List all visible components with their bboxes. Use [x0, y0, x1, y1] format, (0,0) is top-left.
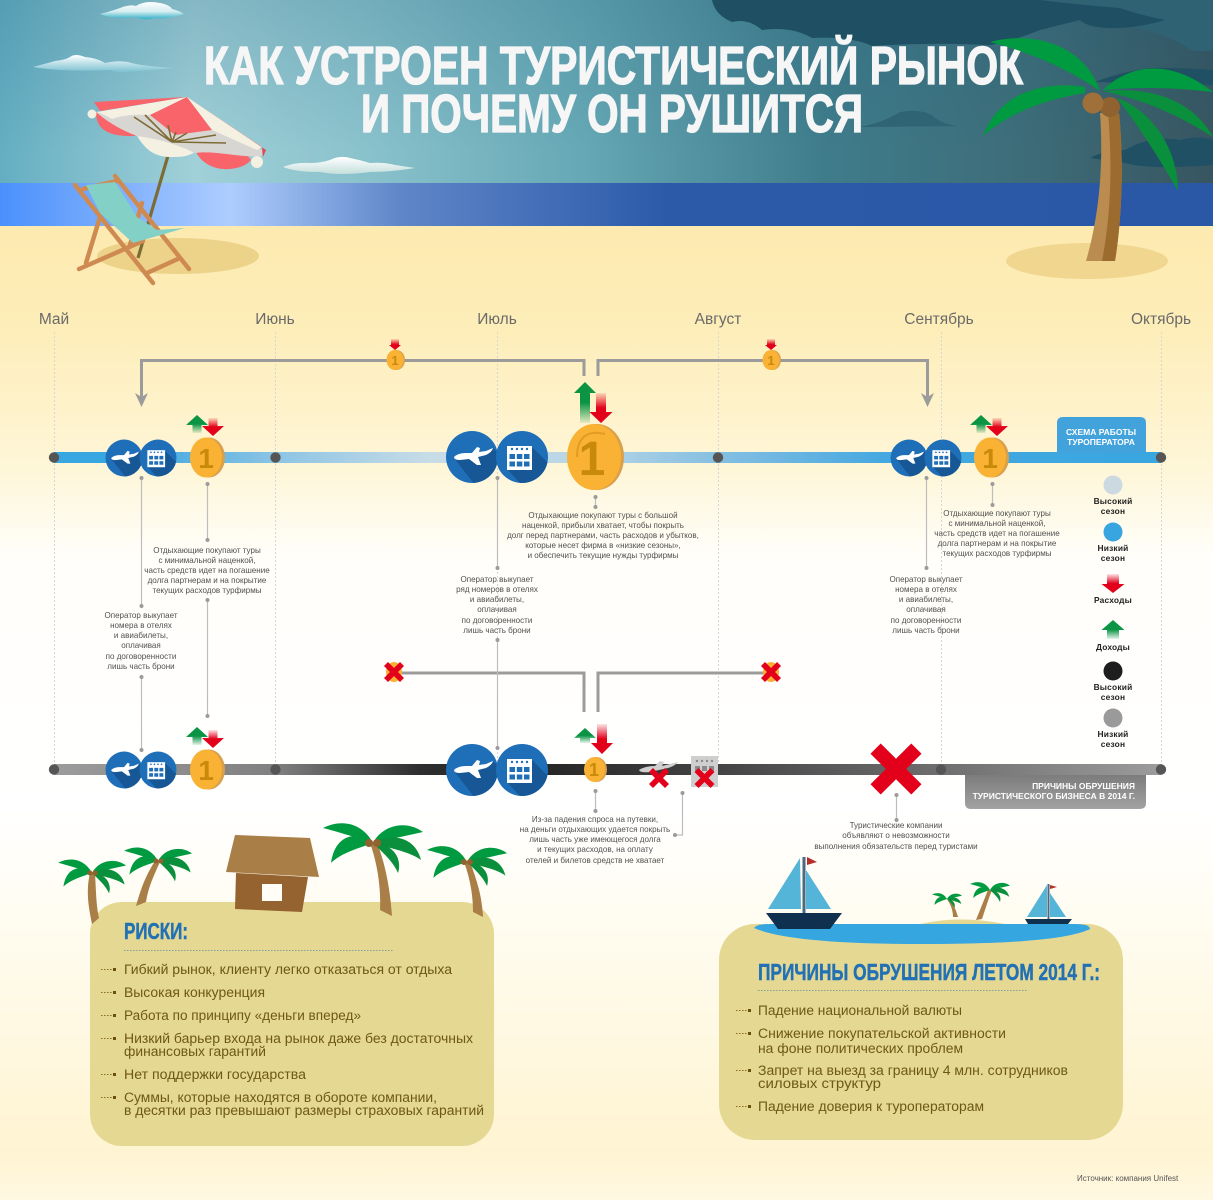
heading: risks: РИСКИ: — [124, 918, 188, 944]
legend: сезон — [1101, 506, 1125, 516]
text: operator buys, July: по договоренности — [462, 616, 532, 625]
text: operator buys, September: лишь часть брони — [892, 626, 960, 635]
month labels: Май — [39, 311, 69, 328]
legend — [1094, 476, 1132, 749]
text: tourists buy, July: и обеспечить текущие нужды турфирмы — [528, 551, 679, 560]
icon: small coin with expense, left — [386, 339, 405, 370]
legend: сезон — [1101, 692, 1125, 702]
month labels: Июнь — [255, 311, 295, 328]
list: risks: Гибкий рынок, клиенту легко отказаться от отдыха — [124, 962, 452, 978]
text: tourists buy, July: долг перед партнерами, часть расходов и убытков, — [507, 531, 699, 540]
text: tourists buy, September: текущих расходов турфирмы — [942, 549, 1052, 558]
legend: сезон — [1101, 739, 1125, 749]
list: collapse causes: силовых структур — [758, 1076, 881, 1092]
text: demand falls: на деньги отдыхающих удается покрыть — [520, 825, 670, 834]
bottom timeline: collapse causes — [49, 764, 1166, 775]
icon: coin with arrows, September top: 1 — [982, 443, 998, 474]
icon: big coin with arrows, July top: 1 — [579, 433, 605, 486]
icon: small coin with arrows, July bottom: 1 — [589, 760, 599, 780]
text: tourists buy, May: долга партнерам и на покрытие — [148, 576, 267, 585]
tab: collapse causes — [965, 775, 1146, 809]
text: tourists buy, July: наценкой, прибыли хватает, чтобы покрыть — [522, 521, 684, 530]
list: risks — [101, 962, 484, 1119]
list: risks: финансовых гарантий — [124, 1044, 266, 1060]
tab: tour operator scheme: ТУРОПЕРАТОРА — [1067, 437, 1135, 447]
month labels — [39, 311, 1191, 328]
text: operator buys, July: оплачивая — [477, 605, 517, 614]
panel: risks — [58, 823, 507, 1146]
list: collapse causes: на фоне политических проблем — [758, 1041, 963, 1057]
icon: small coin with arrows, July bottom — [574, 724, 613, 782]
icon: coin with arrows, May bottom: 1 — [198, 755, 214, 786]
month labels: Август — [695, 311, 741, 328]
text: operator buys, May: номера в отелях — [110, 621, 172, 630]
icon: coin with arrows, September top — [970, 415, 1009, 478]
text: operator buys, May: лишь часть брони — [107, 662, 175, 671]
icon: coin with arrows, May bottom — [186, 727, 225, 790]
list: collapse causes: Запрет на выезд за границу 4 млн. сотрудников — [758, 1063, 1068, 1079]
title — [204, 35, 1024, 144]
storm clouds — [712, 0, 1213, 167]
sea — [0, 183, 1213, 227]
tab: collapse causes: ТУРИСТИЧЕСКОГО БИЗНЕСА В 2014 Г. — [973, 791, 1135, 801]
text: tourists buy, July: Отдыхающие покупают туры с большой — [528, 511, 678, 520]
text: tourists buy, September: часть средств идет на погашение — [934, 529, 1060, 538]
legend: Доходы — [1096, 642, 1130, 652]
list: risks: Высокая конкуренция — [124, 985, 265, 1001]
legend: Высокий — [1094, 682, 1132, 692]
icon: crossed-out hotel — [691, 756, 718, 788]
text: operator buys, May: и авиабилеты, — [114, 631, 168, 640]
month labels: Сентябрь — [904, 311, 974, 328]
text: tourists buy, September: с минимальной наценкой, — [949, 519, 1045, 528]
text: operator buys, July: и авиабилеты, — [470, 595, 524, 604]
arrow: repayment bracket right — [598, 360, 934, 407]
text: operator buys, May: Оператор выкупает — [104, 611, 178, 620]
illustration: palms and hut on the risks panel — [58, 823, 507, 924]
icon: plane and hotel, July top — [446, 431, 567, 507]
icon: small coin with expense, right: 1 — [767, 353, 775, 368]
text: operator buys, September: Оператор выкупает — [889, 575, 963, 584]
tab: tour operator scheme — [1057, 417, 1146, 453]
text: operator buys, September: номера в отелях — [895, 585, 957, 594]
text: operator buys, September: оплачивая — [906, 605, 946, 614]
text: operator buys, September: и авиабилеты, — [899, 595, 953, 604]
legend: Высокий — [1094, 496, 1132, 506]
tab: tour operator scheme: СХЕМА РАБОТЫ — [1066, 427, 1136, 437]
icon: coin with arrows, May top: 1 — [198, 443, 214, 474]
icon: large red cross — [870, 744, 922, 794]
legend: Расходы — [1094, 595, 1132, 605]
list: risks: Низкий барьер входа на рынок даже без достаточных — [124, 1031, 473, 1047]
list: collapse causes — [736, 1003, 1068, 1115]
icon: small coin with expense, left: 1 — [391, 353, 399, 368]
connector: cancelled payment bracket left — [400, 673, 584, 712]
title: И ПОЧЕМУ ОН РУШИТСЯ — [361, 84, 863, 144]
text: demand falls: лишь часть уже имеющегося долга — [529, 835, 661, 844]
legend: Низкий — [1097, 729, 1129, 739]
list: risks: Нет поддержки государства — [124, 1067, 306, 1083]
text: operator buys, May: оплачивая — [121, 641, 161, 650]
panel: collapse causes — [719, 857, 1123, 1140]
icon: cancelled coin right — [761, 662, 781, 682]
heading: collapse causes: ПРИЧИНЫ ОБРУШЕНИЯ ЛЕТОМ 2014 Г.: — [758, 959, 1100, 985]
month labels: Октябрь — [1131, 311, 1191, 328]
text: tourists buy, September: Отдыхающие покупают туры — [943, 509, 1051, 518]
text: operator buys, July: Оператор выкупает — [460, 575, 534, 584]
legend: сезон — [1101, 553, 1125, 563]
list: collapse causes: Падение национальной валюты — [758, 1003, 962, 1019]
illustration: island, boats and water — [754, 857, 1090, 944]
text: tourists buy, July: которые несет фирма в «низкие сезоны», — [525, 541, 681, 550]
icon: plane and hotel, July bottom — [446, 744, 567, 820]
legend: Низкий — [1097, 543, 1129, 553]
list: risks: в десятки раз превышают размеры страховых гарантий — [124, 1103, 484, 1119]
text: operator buys, May: по договоренности — [106, 652, 176, 661]
text: demand falls: и текущих расходов, на оплату — [537, 845, 653, 854]
illustration: large palm tree — [983, 38, 1213, 279]
list: collapse causes: Падение доверия к туроператорам — [758, 1099, 984, 1115]
text: tourists buy, May: с минимальной наценкой, — [159, 556, 255, 565]
source note: Источник: компания Unifest — [1077, 1174, 1179, 1183]
list: risks: Суммы, которые находятся в обороте компании, — [124, 1090, 437, 1106]
sky background — [0, 0, 1213, 184]
text: companies default: Туристические компании — [850, 821, 942, 830]
text: demand falls: Из-за падения спроса на путевки, — [532, 815, 658, 824]
text: operator buys, July: ряд номеров в отелях — [456, 585, 538, 594]
list: collapse causes: Снижение покупательской активности — [758, 1026, 1006, 1042]
tab: collapse causes: ПРИЧИНЫ ОБРУШЕНИЯ — [1032, 781, 1135, 791]
top timeline: tour operator scheme — [49, 452, 1166, 463]
list: risks: Работа по принципу «деньги вперед» — [124, 1008, 361, 1024]
month labels: Июль — [477, 311, 517, 328]
text: tourists buy, May: Отдыхающие покупают туры — [153, 546, 261, 555]
icon: small coin with expense, right — [762, 339, 781, 370]
text: tourists buy, September: долга партнерам и на покрытие — [938, 539, 1057, 548]
white clouds — [33, 2, 415, 174]
icon: plane and hotel, September top — [891, 440, 975, 494]
icon: big coin with arrows, July top — [567, 382, 624, 490]
arrow: repayment bracket left — [135, 360, 584, 407]
text: tourists buy, May: часть средств идет на погашение — [144, 566, 270, 575]
text: demand falls: отелей и билетов средств не хватает — [526, 856, 665, 865]
text: companies default: выполнения обязательств перед туристами — [814, 842, 978, 851]
text: operator buys, September: по договоренности — [891, 616, 961, 625]
icon: plane and hotel, May bottom — [106, 752, 190, 806]
illustration: beach umbrella and deck chair — [75, 97, 266, 283]
text: companies default: объявляют о невозможности — [842, 831, 950, 840]
connector: cancelled payment bracket right — [598, 673, 765, 712]
icon: coin with arrows, May top — [186, 415, 225, 478]
icon: cancelled coin left — [384, 662, 404, 682]
text: tourists buy, May: текущих расходов турфирмы — [152, 586, 262, 595]
icon: crossed-out plane — [639, 761, 678, 788]
icon: plane and hotel, May top — [106, 440, 190, 494]
text: operator buys, July: лишь часть брони — [463, 626, 531, 635]
